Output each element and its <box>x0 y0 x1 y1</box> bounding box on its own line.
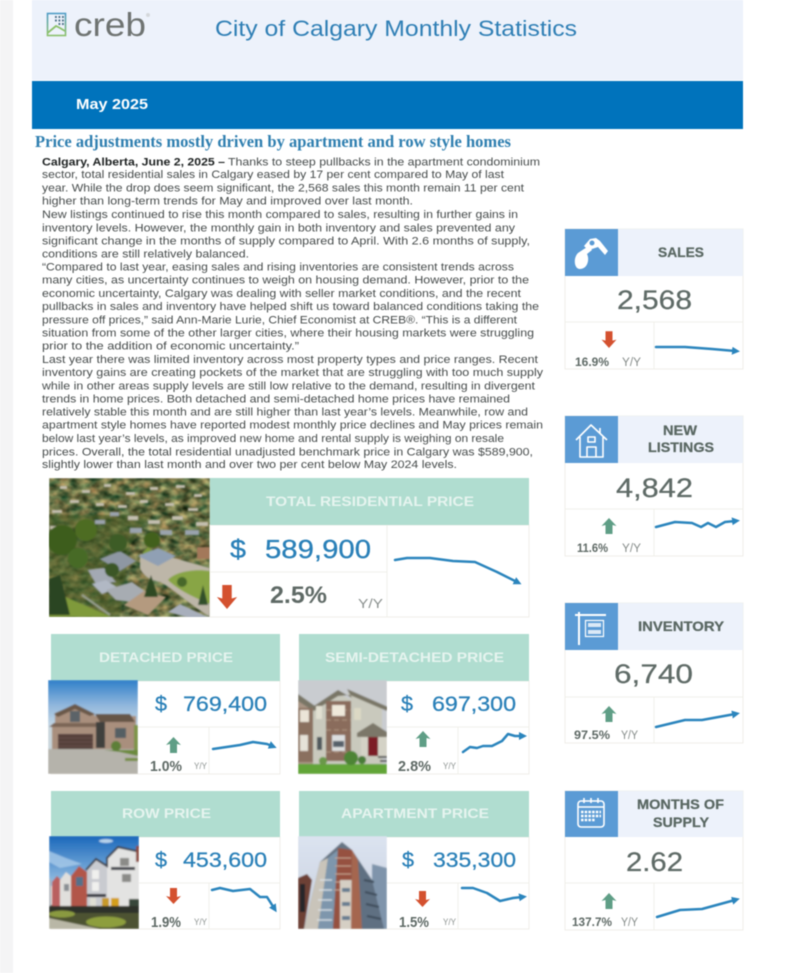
percent change: 97.5% <box>574 730 610 742</box>
percent change: 1.0% <box>150 758 182 775</box>
sparkline <box>656 521 735 527</box>
price value: $ <box>401 693 413 716</box>
body text: prices. Overall, the total residential unadjusted benchmark price in Calgary was $589,900, <box>42 446 533 458</box>
price value <box>402 849 516 872</box>
icon: up arrow <box>602 706 616 722</box>
header band <box>51 634 280 681</box>
price value: 453,600 <box>183 849 267 872</box>
price value <box>401 693 516 716</box>
year over year label: Y/Y <box>358 596 383 611</box>
body text: situation from some of the other larger cities, where their housing markets were struggling <box>42 328 534 340</box>
body text: New listings continued to rise this month compared to sales, resulting in further gains in <box>42 209 518 221</box>
sparkline <box>395 558 517 582</box>
price value: $ <box>402 849 414 872</box>
icon: up arrow <box>166 737 181 753</box>
photo: apartment tower <box>298 836 387 929</box>
header band <box>210 478 529 525</box>
price value: 769,400 <box>183 693 267 716</box>
panel: total residential price <box>47 478 529 621</box>
heading: SUPPLY <box>653 814 710 830</box>
header band <box>618 603 743 650</box>
panel: row price <box>49 791 280 931</box>
price value <box>155 693 267 716</box>
body text: higher than long-term trends for May and improved over last month. <box>42 196 413 208</box>
body text: inventory gains are creating pockets of the market that are struggling with too much supply <box>42 367 543 379</box>
icon: down arrow <box>415 891 430 907</box>
icon: down arrow <box>166 888 181 904</box>
heading: MONTHS OF <box>637 796 724 812</box>
body text: prior to the addition of economic uncertainty.” <box>42 341 299 353</box>
heading: INVENTORY <box>638 618 725 634</box>
price value: 697,300 <box>432 693 516 716</box>
icon: down arrow <box>602 331 616 348</box>
logo wordmark: creb <box>74 6 146 43</box>
body text: pressure off prices,” said Ann-Marie Lurie, Chief Economist at CREB®. “This is a different <box>42 314 518 326</box>
price value: 589,900 <box>265 534 371 564</box>
sparkline <box>212 888 274 908</box>
price value: $ <box>155 693 167 716</box>
body box <box>210 525 529 617</box>
year over year label: Y/Y <box>443 761 456 771</box>
panel: months of supply <box>565 791 743 930</box>
icon: house <box>565 416 618 463</box>
photo: semi-detached house <box>298 680 388 774</box>
price value: 335,300 <box>433 849 516 872</box>
body text: slightly lower than last month and over two per cent below May 2024 levels. <box>42 459 457 471</box>
date banner: May 2025 <box>76 97 148 113</box>
icon: down arrow <box>217 585 237 609</box>
body text: “Compared to last year, easing sales and rising inventories are consistent trends across <box>42 262 514 274</box>
header band <box>299 791 529 837</box>
heading: APARTMENT PRICE <box>341 806 489 821</box>
icon: creb logo mark <box>48 14 66 36</box>
sparkline <box>656 714 735 727</box>
value: 2.62 <box>626 847 683 877</box>
icon: up arrow <box>602 893 616 909</box>
body text: conditions are still relatively balanced. <box>42 249 249 261</box>
icon: up arrow <box>602 518 616 534</box>
body text: year. While the drop does seem significant, the 2,568 sales this month remain 11 per cent <box>42 182 525 194</box>
year over year label: Y/Y <box>194 917 207 927</box>
heading <box>637 796 724 830</box>
icon: calendar <box>565 791 618 837</box>
header band <box>618 791 743 837</box>
header band <box>299 634 529 681</box>
header band <box>618 416 743 463</box>
year over year label: Y/Y <box>621 917 638 929</box>
icon: up arrow <box>416 731 430 747</box>
body text: many cities, as uncertainty continues to weigh on housing demand. However, prior to the <box>42 275 529 287</box>
body text: pullbacks in sales and inventory have helped shift us toward balanced conditions taking the <box>42 301 539 313</box>
percent change: 137.7% <box>572 917 612 929</box>
body text: inventory levels. However, the monthly gain in both inventory and sales prevented any <box>42 222 515 234</box>
body text: Calgary, Alberta, June 2, 2025 – <box>42 157 225 169</box>
body text: below last year’s levels, as improved new home and rental supply is weighing on resale <box>42 433 504 445</box>
photo: row houses <box>49 836 139 929</box>
price value <box>230 534 371 564</box>
sparkline <box>657 900 735 917</box>
title: City of Calgary Monthly Statistics <box>215 16 577 41</box>
value: 6,740 <box>614 659 693 689</box>
panel: apartment price <box>298 791 529 931</box>
panel: semi-detached price <box>298 634 529 775</box>
percent change: 2.5% <box>270 582 327 609</box>
headline: Price adjustments mostly driven by apartment and row style homes <box>35 132 512 151</box>
panel: detached price <box>48 634 280 775</box>
icon: for sale sign <box>565 603 618 650</box>
sparkline <box>213 742 272 749</box>
price value: $ <box>155 849 167 872</box>
icon: keys <box>565 229 618 276</box>
body text: while in other areas supply levels are still low relative to the demand, resulting in divergent <box>41 380 536 392</box>
value: 4,842 <box>616 473 693 503</box>
year over year label: Y/Y <box>194 761 207 771</box>
percent change: 11.6% <box>577 543 608 555</box>
price value: $ <box>230 534 247 564</box>
body text: sector, total residential sales in Calgary eased by 17 per cent compared to May of last <box>42 169 505 181</box>
percent change: 2.8% <box>398 758 431 775</box>
year over year label: Y/Y <box>622 543 641 555</box>
header banner <box>32 0 743 80</box>
heading: LISTINGS <box>648 439 714 455</box>
heading: DETACHED PRICE <box>99 650 233 665</box>
body text: Thanks to steep pullbacks in the apartment condominium <box>228 157 540 169</box>
sparkline <box>462 888 522 901</box>
value: 2,568 <box>617 285 692 315</box>
header band <box>618 229 743 276</box>
body text: significant change in the months of supply compared to April. With 2.6 months of supply, <box>42 236 530 248</box>
year over year label: Y/Y <box>622 357 641 369</box>
body text: apartment style homes have reported modest monthly price declines and May prices remain <box>42 419 543 431</box>
percent change: 16.9% <box>575 357 609 369</box>
price value <box>155 849 267 872</box>
heading: ROW PRICE <box>122 806 211 821</box>
body text: trends in home prices. Both detached and semi-detached home prices have remained <box>42 394 510 406</box>
body text: relatively stable this month and are still higher than last year’s levels. Meanwhile, row and <box>42 406 528 418</box>
date banner <box>32 81 743 129</box>
panel: new listings <box>565 416 743 556</box>
sparkline <box>656 347 735 351</box>
sparkline <box>463 734 522 752</box>
body text: Last year there was limited inventory across most property types and price ranges. Recent <box>42 354 539 366</box>
heading: SEMI-DETACHED PRICE <box>325 650 504 665</box>
heading: TOTAL RESIDENTIAL PRICE <box>266 494 474 509</box>
photo: aerial neighbourhood <box>47 478 210 621</box>
year over year label: Y/Y <box>621 730 638 742</box>
percent change: 1.9% <box>151 914 181 931</box>
year over year label: Y/Y <box>443 917 456 927</box>
body text <box>41 157 543 471</box>
registered mark <box>146 13 150 17</box>
heading <box>648 422 714 455</box>
panel: sales <box>565 229 743 369</box>
body text: economic uncertainty, Calgary was dealing with seller market conditions, and the recent <box>42 288 522 300</box>
percent change: 1.5% <box>399 914 429 931</box>
header band <box>51 791 280 837</box>
heading: NEW <box>663 422 698 438</box>
heading: SALES <box>658 244 704 260</box>
panel: inventory <box>565 603 743 743</box>
photo: detached house <box>48 680 138 774</box>
